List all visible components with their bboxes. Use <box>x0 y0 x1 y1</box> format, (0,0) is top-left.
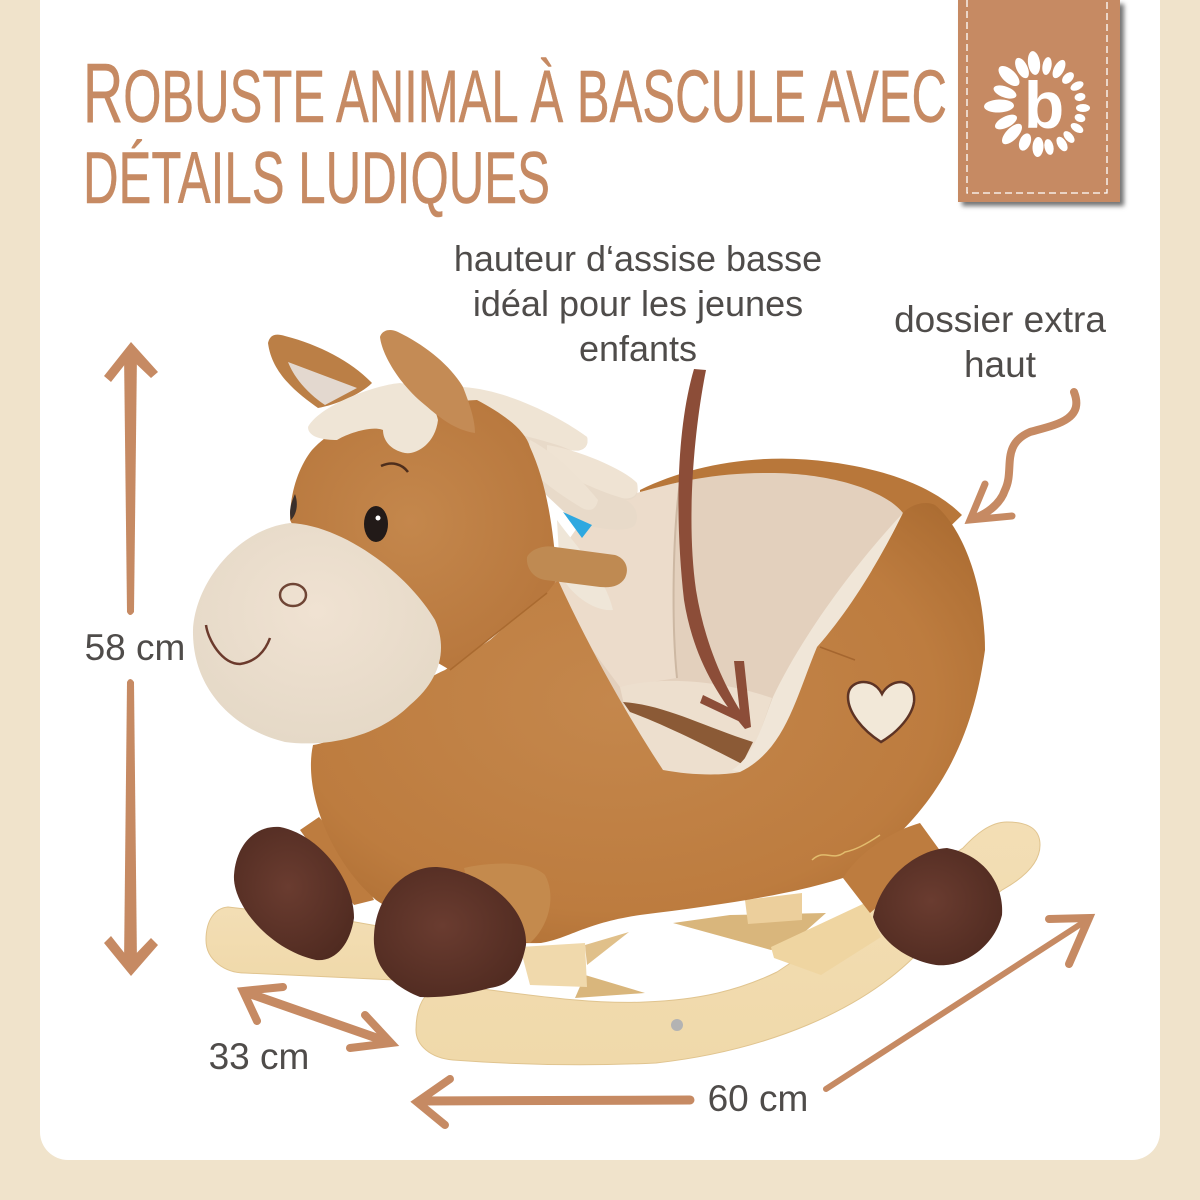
far eye <box>290 494 297 520</box>
arrow: seat height <box>678 369 751 729</box>
title <box>83 46 947 219</box>
icon: brand flower logo <box>984 50 1090 157</box>
arrow: backrest <box>970 392 1076 520</box>
title: DÉTAILS LUDIQUES <box>83 138 550 219</box>
mane tufts <box>463 387 638 610</box>
front leg <box>464 864 550 943</box>
arrow: width diagonal <box>826 918 1089 1089</box>
seat crease <box>674 482 680 678</box>
ear left <box>268 335 372 408</box>
rocker bolt <box>671 1019 683 1031</box>
ear left inner <box>288 362 357 405</box>
strap <box>623 702 753 764</box>
neck seam <box>450 593 547 670</box>
label: backrest: dossier extra <box>894 299 1106 340</box>
neck and head <box>290 400 557 670</box>
arrow: height bottom <box>104 679 158 976</box>
label: backrest: haut <box>964 344 1037 385</box>
label: seat height: idéal pour les jeunes <box>473 283 803 324</box>
body <box>311 503 985 943</box>
eyebrow <box>381 464 408 472</box>
label: seat height <box>454 238 822 369</box>
rear wooden rocker <box>206 907 400 980</box>
label: seat height: enfants <box>579 328 697 369</box>
front wooden rocker <box>416 822 1040 1065</box>
right hind leg <box>843 823 941 913</box>
arrow: depth <box>243 987 391 1048</box>
mouth <box>206 625 270 664</box>
seat interior back <box>540 473 903 775</box>
seat cushion <box>620 681 772 775</box>
label: seat height: hauteur d‘assise basse <box>454 238 822 279</box>
nostril <box>280 584 306 606</box>
seat outer back rim <box>640 459 962 570</box>
label: width: 60 cm <box>708 1078 808 1119</box>
rear leg left <box>300 817 374 905</box>
rocking horse illustration <box>193 330 1040 1065</box>
label: depth: 33 cm <box>209 1036 309 1077</box>
wooden crossbars <box>520 893 826 998</box>
side slit <box>820 647 855 660</box>
seat plank <box>771 903 881 975</box>
label: height: 58 cm <box>85 627 185 668</box>
arrow: width <box>417 1079 690 1125</box>
handle <box>527 546 627 587</box>
heart patch <box>848 682 914 742</box>
icon: brand flower logo: b <box>1024 68 1064 142</box>
forelock <box>308 383 438 453</box>
seat left panel <box>540 482 680 687</box>
eye <box>364 506 388 542</box>
muzzle <box>193 523 441 743</box>
cream rim <box>732 513 903 772</box>
blue label <box>563 512 592 538</box>
signature <box>812 835 880 860</box>
arrow: height top <box>104 342 158 615</box>
brand tag <box>958 0 1120 202</box>
hooves <box>234 827 1002 997</box>
ear right <box>380 330 475 433</box>
label: backrest <box>894 299 1106 385</box>
